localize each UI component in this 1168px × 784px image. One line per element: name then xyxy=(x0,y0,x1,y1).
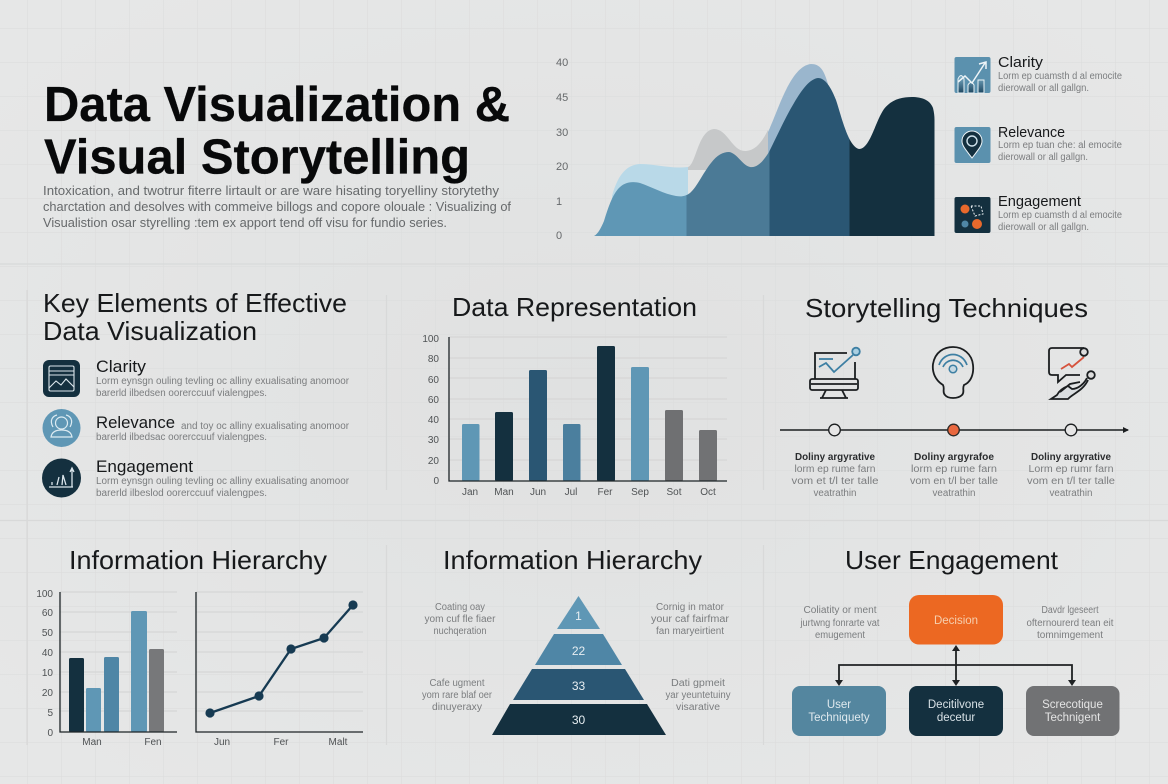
area chart y-axis labels: 30 xyxy=(556,127,568,139)
legend: engagement: Lorm ep cuamsth d al emocite xyxy=(998,210,1122,221)
legend: engagement xyxy=(954,193,1122,233)
note: bottom right: yar yeuntetuiny xyxy=(666,690,730,701)
y-axis labels: 100 xyxy=(422,334,439,345)
technique caption 3: vom en t/l ter talle xyxy=(1027,476,1115,487)
icon: person in circle xyxy=(42,409,80,447)
intro text block: charctation and desolves with commeive billogs and copore olouale : Visualizing of xyxy=(43,199,511,214)
legend: relevance: dierowall or all gallgn. xyxy=(998,152,1088,163)
back layer: pale blue xyxy=(612,164,688,200)
timeline point 3 xyxy=(1065,424,1077,436)
legend: engagement: dierowall or all gallgn. xyxy=(998,222,1089,233)
decision box dark: Decitilvone xyxy=(928,699,984,711)
user technique box xyxy=(792,686,886,736)
user technique box: User xyxy=(827,699,851,711)
x-axis labels xyxy=(82,737,162,748)
note: left: Coliatity or ment xyxy=(804,605,877,616)
title: Visual Storytelling xyxy=(44,130,470,184)
heading: information hierarchy: Information Hierarchy xyxy=(443,545,702,575)
tier 2 xyxy=(535,634,622,665)
y-axis labels: 10 xyxy=(42,668,53,679)
y-axis labels: 100 xyxy=(36,589,53,600)
panel: user engagement xyxy=(792,545,1120,736)
line chart xyxy=(196,592,363,748)
note: top left: Coating oay xyxy=(435,602,485,613)
title xyxy=(44,78,510,184)
item: relevance: barerld ilbedsac oorerccuuf vialengpes. xyxy=(96,432,267,443)
tier 1 xyxy=(557,596,600,629)
y-axis labels xyxy=(422,334,439,487)
note: bottom left xyxy=(422,678,493,713)
icon: monitor with chart xyxy=(810,348,860,398)
technique caption 2: veatrathin xyxy=(932,488,976,499)
grouped bar chart xyxy=(36,589,177,748)
icon: chat bubble and hand xyxy=(1049,348,1095,399)
note: top right: fan maryeirtient xyxy=(656,626,724,637)
technique caption 3: veatrathin xyxy=(1050,488,1092,499)
note: left: emugement xyxy=(815,630,865,641)
y-axis labels: 40 xyxy=(42,648,53,659)
x-axis labels: Sep xyxy=(631,487,649,498)
x-axis labels: Oct xyxy=(700,487,716,498)
grey technique box: Technigent xyxy=(1045,712,1101,724)
technique caption 1: Doliny argyrative xyxy=(795,451,875,463)
technique caption 2: lorm ep rume farn xyxy=(911,464,997,475)
tier 3: 33 xyxy=(572,679,585,693)
legend: clarity: dierowall or all gallgn. xyxy=(998,83,1089,94)
grouped bars xyxy=(69,611,164,732)
timeline point 2 xyxy=(948,424,959,436)
top legend xyxy=(954,54,1122,233)
y-axis labels: 20 xyxy=(42,688,53,699)
timeline arrow xyxy=(780,424,1129,436)
heading: information hierarchy: Information Hierarchy xyxy=(69,545,327,575)
note: top left xyxy=(424,602,496,637)
legend: clarity: Clarity xyxy=(998,54,1044,71)
note: bottom left: dinuyeraxy xyxy=(432,702,482,713)
bars xyxy=(462,346,717,481)
technique caption 1: vom et t/l ter talle xyxy=(792,476,879,487)
panel: key elements xyxy=(42,288,350,499)
area chart xyxy=(556,57,940,242)
note: top right: your caf fairfmar xyxy=(651,614,730,625)
tier 2: 22 xyxy=(572,644,585,658)
technique caption 2 xyxy=(910,451,998,499)
y-axis labels: 30 xyxy=(428,435,439,446)
note: bottom right: visarative xyxy=(676,702,720,713)
heading: storytelling techniques: Storytelling Techniques xyxy=(805,293,1088,323)
note: bottom left: yom rare blaf oer xyxy=(422,690,493,701)
panel: storytelling techniques xyxy=(780,293,1129,499)
note: right: tomnimgement xyxy=(1037,630,1103,641)
y-axis labels: 50 xyxy=(42,628,53,639)
y-axis labels: 20 xyxy=(428,456,439,467)
front layer: four coloured segments xyxy=(594,78,934,236)
icon: rising bars xyxy=(954,57,990,93)
heading: key elements: Key Elements of Effective xyxy=(43,288,347,318)
y-axis labels: 40 xyxy=(428,415,439,426)
item: clarity xyxy=(43,357,350,399)
technique caption 3: Doliny argyrative xyxy=(1031,451,1111,463)
legend: relevance xyxy=(954,124,1122,163)
tier 4: 30 xyxy=(572,713,585,727)
heading: key elements: Data Visualization xyxy=(43,316,257,346)
x-axis labels: Sot xyxy=(666,487,682,498)
item: clarity: Lorm eynsgn ouling tevling oc alliny exualisating anomoor xyxy=(96,376,350,387)
connector arrows xyxy=(835,645,1076,686)
legend: clarity: Lorm ep cuamsth d al emocite xyxy=(998,71,1122,82)
intro text block xyxy=(43,183,511,230)
tier 4 xyxy=(492,704,666,735)
x-axis labels: Fer xyxy=(274,737,289,748)
decision box dark xyxy=(909,686,1003,736)
intro text block: Visualistion osar styrelling :tem ex apport tend off visu for fundio series. xyxy=(43,215,447,230)
title: Data Visualization & xyxy=(44,78,510,132)
heading: data representation: Data Representation xyxy=(452,292,697,322)
icon: network dots xyxy=(954,197,990,233)
panel: data representation xyxy=(422,292,727,498)
area chart y-axis labels: 45 xyxy=(556,92,568,104)
y-axis labels: 60 xyxy=(42,608,53,619)
y-axis labels: 0 xyxy=(433,476,439,487)
item: relevance: Relevance xyxy=(96,413,175,432)
x-axis labels: Fen xyxy=(144,737,162,748)
item: engagement: barerld ilbeslod oorerccuuf vialengpes. xyxy=(96,488,267,499)
x-axis labels: Jun xyxy=(530,487,546,498)
item: engagement: Lorm eynsgn ouling tevling oc alliny exualisating anomoor xyxy=(96,476,350,487)
grey technique box: Screcotique xyxy=(1042,699,1103,711)
icon: location pin xyxy=(954,127,990,163)
icon: dashboard window xyxy=(43,360,80,397)
timeline point 1 xyxy=(829,424,840,436)
note: bottom right: Dati gpmeit xyxy=(671,678,725,689)
note: left: jurtwng fonrarte vat xyxy=(800,618,880,629)
decision box dark: decetur xyxy=(937,712,975,724)
note: top right: Cornig in mator xyxy=(656,602,725,613)
technique caption 2: Doliny argyrafoe xyxy=(914,451,994,463)
y-axis labels: 80 xyxy=(428,354,439,365)
note: top left: yom cuf fle fiaer xyxy=(424,614,496,625)
item: relevance: and toy oc alliny exualisating anomoor xyxy=(181,421,350,432)
tier 3 xyxy=(513,669,644,700)
x-axis labels: Malt xyxy=(329,737,348,748)
legend: clarity xyxy=(954,54,1122,94)
technique caption 1 xyxy=(792,451,879,499)
note: top right xyxy=(651,602,730,637)
y-axis labels: 60 xyxy=(428,395,439,406)
item: engagement: Engagement xyxy=(96,457,193,476)
legend: engagement: Engagement xyxy=(998,193,1082,210)
technique caption 2: vom en t/l ber talle xyxy=(910,476,998,487)
intro text block: Intoxication, and twotrur fiterre lirtault or are ware hisating toryelliny storytethy xyxy=(43,183,500,198)
technique caption 3: Lorm ep rumr farn xyxy=(1028,464,1114,475)
item: relevance xyxy=(42,409,350,447)
heading: key elements xyxy=(43,288,347,346)
legend: relevance: Lorm ep tuan che: al emocite xyxy=(998,140,1122,151)
y-axis labels: 5 xyxy=(47,708,53,719)
pyramid chart xyxy=(492,596,666,735)
area chart y-axis labels: 40 xyxy=(556,57,568,69)
x-axis labels: Fer xyxy=(598,487,613,498)
heading: user engagement: User Engagement xyxy=(845,545,1059,575)
x-axis labels: Jan xyxy=(462,487,478,498)
x-axis labels: Jul xyxy=(565,487,577,498)
y-axis labels: 60 xyxy=(428,375,439,386)
bar chart xyxy=(422,334,727,498)
icon: head with signal xyxy=(933,347,973,398)
item: engagement xyxy=(42,457,350,499)
technique caption 1: lorm ep rume farn xyxy=(794,464,876,475)
user technique box: Techniquety xyxy=(808,712,870,724)
panel: information hierarchy charts xyxy=(36,545,363,748)
item: clarity: Clarity xyxy=(96,357,147,376)
note: right xyxy=(1026,605,1114,641)
legend: relevance: Relevance xyxy=(998,124,1065,141)
back layer: grey xyxy=(688,129,768,170)
note: bottom right xyxy=(666,678,730,713)
technique caption 3 xyxy=(1027,451,1115,499)
x-axis labels: Jun xyxy=(214,737,230,748)
note: top left: nuchqeration xyxy=(434,626,486,637)
technique caption 1: veatrathin xyxy=(814,488,856,499)
back layer: blue-grey peak xyxy=(768,64,828,155)
note: left xyxy=(800,605,880,641)
x-axis labels: Man xyxy=(82,737,102,748)
item: clarity: barerld ilbedsen oorerccuuf vialengpes. xyxy=(96,388,267,399)
x-axis labels xyxy=(462,487,716,498)
y-axis labels xyxy=(36,589,53,739)
panel: pyramid xyxy=(422,545,730,735)
data line xyxy=(205,600,358,718)
area chart y-axis labels xyxy=(556,57,568,242)
decision box xyxy=(909,595,1003,644)
y-axis labels: 0 xyxy=(47,728,53,739)
note: bottom left: Cafe ugment xyxy=(430,678,485,689)
x-axis labels xyxy=(214,737,348,748)
area chart y-axis labels: 1 xyxy=(556,196,562,208)
decision box: Decision xyxy=(934,615,978,627)
area chart y-axis labels: 20 xyxy=(556,161,568,173)
area chart y-axis labels: 0 xyxy=(556,230,562,242)
grey technique box xyxy=(1026,686,1120,736)
note: right: ofternourerd tean eit xyxy=(1026,618,1114,629)
icon: growth chart in circle xyxy=(42,458,81,498)
tier 1: 1 xyxy=(575,609,582,623)
note: right: Davdr lgeseert xyxy=(1042,605,1099,616)
x-axis labels: Man xyxy=(494,487,514,498)
